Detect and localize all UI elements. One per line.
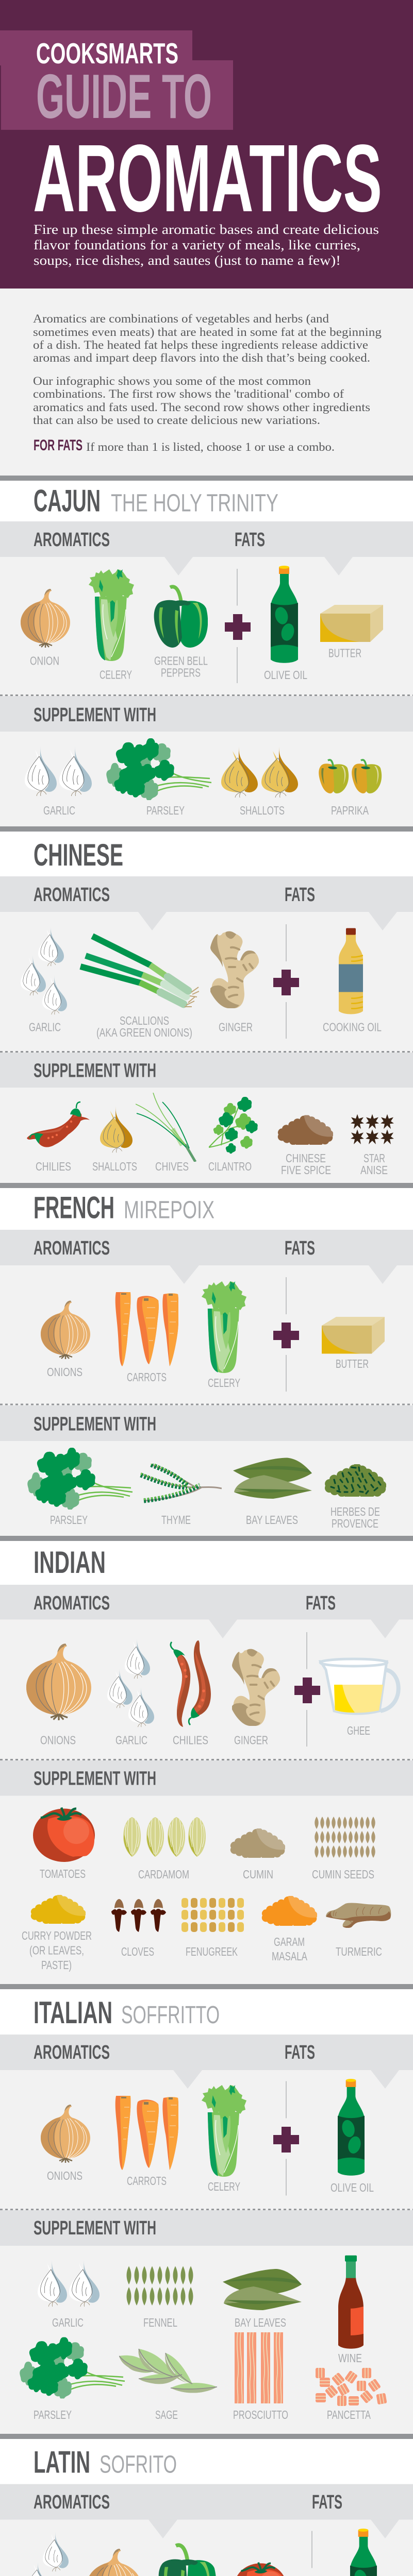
icon: carrots: [115, 2095, 178, 2170]
band: supplement with: [0, 2210, 413, 2246]
icon: olive oil: [271, 566, 298, 663]
icon: garlic: [107, 1636, 154, 1727]
heading: chinese: CHINESE: [34, 838, 123, 872]
labels: chinese aromatics and fats: GARLIC: [29, 1020, 61, 1033]
subtitle: soups, rice dishes, and sautes (just to name a few)!: [34, 253, 341, 268]
labels: chinese supplements: CILANTRO: [208, 1160, 252, 1173]
icon: cilantro: [209, 1097, 258, 1154]
icon: cardamom: [123, 1817, 206, 1857]
icon: turmeric: [326, 1903, 391, 1928]
section: french: [0, 1183, 413, 1530]
icon: fennel: [127, 2266, 193, 2306]
logo tab: [0, 30, 233, 130]
labels: indian supplements row 2: MASALA: [272, 1950, 307, 1963]
labels: indian supplements row 1: CUMIN SEEDS: [312, 1868, 374, 1881]
band: aromatics and fats: [0, 876, 413, 930]
labels: french supplements: THYME: [161, 1513, 191, 1527]
labels: indian aromatics and fats: [40, 1724, 370, 1747]
icon: ginger: [232, 1649, 280, 1726]
labels: cajun supplements: SHALLOTS: [240, 804, 285, 817]
icon: garlic: [25, 2529, 72, 2576]
labels: chinese supplements: FIVE SPICE: [281, 1163, 331, 1177]
band: aromatics and fats: FATS: [306, 1592, 336, 1614]
labels: french aromatics and fats: [47, 1357, 369, 1389]
divider and plus: [273, 1277, 299, 1392]
labels: chinese supplements: STAR: [364, 1151, 385, 1165]
band: aromatics and fats: AROMATICS: [34, 2492, 110, 2513]
subtitle: Fire up these simple aromatic bases and create delicious: [34, 222, 379, 237]
band: aromatics and fats: AROMATICS: [34, 884, 110, 906]
icon: onions: [26, 1643, 91, 1720]
section: cajun: [0, 476, 413, 817]
labels: french aromatics and fats: ONIONS: [47, 1365, 82, 1379]
icon: onions: [41, 2105, 90, 2163]
band: supplement with: SUPPLEMENT WITH: [34, 2217, 156, 2239]
intro text: FOR FATS: [34, 437, 82, 454]
icon: fenugreek: [181, 1898, 244, 1932]
icon: paprika: [319, 760, 382, 793]
subheading: THE HOLY TRINITY: [111, 489, 278, 517]
labels: cajun aromatics and fats: BUTTER: [328, 647, 361, 660]
labels: italian supplements: FENNEL: [143, 2316, 177, 2329]
labels: chinese supplements: CHIVES: [155, 1160, 189, 1173]
icon: butter: [320, 605, 383, 642]
icon: thyme: [141, 1463, 222, 1501]
band: supplement with: [0, 696, 413, 732]
band: supplement with: [0, 1405, 413, 1441]
labels: indian aromatics and fats: GARLIC: [115, 1733, 147, 1747]
icon: pancetta: [316, 2368, 387, 2406]
labels: cajun aromatics and fats: CELERY: [100, 668, 132, 681]
icon: bell peppers: [159, 2545, 216, 2576]
heading: indian: INDIAN: [34, 1545, 106, 1580]
icon: chilies: [27, 1102, 90, 1147]
divider and plus: [273, 2081, 299, 2196]
section: chinese: [0, 826, 413, 1177]
intro text: of a dish. The heated fat helps these ingredients release addictive: [33, 338, 368, 351]
icon: sage: [119, 2349, 217, 2393]
band: aromatics and fats: FATS: [312, 2492, 342, 2513]
icon: cumin: [230, 1828, 286, 1860]
icon: onion: [21, 589, 70, 648]
icon: wine: [338, 2256, 364, 2349]
icon: prosciutto: [235, 2332, 283, 2403]
band: aromatics and fats: FATS: [285, 1238, 315, 1259]
band: aromatics and fats: AROMATICS: [34, 1238, 110, 1259]
band: supplement with: [0, 1760, 413, 1796]
heading: cajun: CAJUN: [34, 483, 101, 518]
labels: italian supplements: PARSLEY: [34, 2408, 72, 2421]
labels: french supplements: PROVENCE: [332, 1517, 378, 1530]
labels: french aromatics and fats: BUTTER: [336, 1357, 369, 1370]
labels: italian aromatics and fats: [47, 2169, 374, 2194]
subtitle: flavor foundations for a variety of meals, like curries,: [34, 238, 360, 252]
labels: italian supplements: BAY LEAVES: [235, 2316, 286, 2329]
subheading: MIREPOIX: [124, 1196, 214, 1224]
labels: indian aromatics and fats: ONIONS: [40, 1733, 76, 1747]
labels: indian supplements row 1: CARDAMOM: [138, 1868, 189, 1881]
icon: cloves: [111, 1899, 166, 1932]
labels: french aromatics and fats: CARROTS: [127, 1370, 167, 1384]
subheading: SOFFRITTO: [121, 2002, 220, 2029]
icon: carrots: [115, 1291, 178, 1366]
labels: indian supplements row 2: GARAM: [274, 1935, 305, 1948]
icon: parsley: [106, 738, 211, 801]
labels: chinese supplements: SHALLOTS: [92, 1160, 137, 1173]
labels: indian aromatics and fats: CHILIES: [173, 1733, 208, 1747]
icon: shallots: [221, 744, 298, 798]
labels: indian supplements row 2: PASTE): [41, 1958, 72, 1972]
icon: bay leaves: [223, 2269, 302, 2310]
labels: french supplements: BAY LEAVES: [246, 1513, 298, 1527]
labels: italian supplements: [34, 2316, 371, 2421]
band: aromatics and fats: FATS: [235, 529, 265, 551]
labels: italian aromatics and fats: CELERY: [208, 2180, 240, 2193]
intro text: aromatics and fats used. The second row shows other ingredients: [33, 401, 370, 414]
labels: cajun supplements: PARSLEY: [146, 804, 185, 817]
labels: chinese aromatics and fats: SCALLIONS: [120, 1014, 169, 1027]
labels: indian supplements row 2: FENUGREEK: [186, 1945, 238, 1958]
icon: garlic: [21, 924, 67, 1014]
band: aromatics and fats: AROMATICS: [34, 2042, 110, 2063]
labels: indian supplements row 2: CLOVES: [121, 1945, 154, 1958]
divider and plus: [299, 2531, 325, 2576]
icon: ginger: [210, 931, 259, 1008]
band: aromatics and fats: [0, 521, 413, 575]
labels: cajun supplements: GARLIC: [43, 804, 75, 817]
intro text: Aromatics are combinations of vegetables and herbs (and: [33, 312, 329, 325]
icon: curry powder: [31, 1894, 86, 1926]
labels: french aromatics and fats: CELERY: [208, 1376, 240, 1389]
labels: italian aromatics and fats: OLIVE OIL: [331, 2181, 374, 2194]
divider and plus: [294, 1632, 320, 1747]
icon: chilies: [171, 1640, 211, 1727]
heading: italian: ITALIAN: [34, 1995, 112, 2030]
icon: celery: [202, 2085, 246, 2177]
labels: indian supplements row 2: TURMERIC: [336, 1945, 382, 1958]
labels: italian supplements: PROSCIUTTO: [233, 2408, 288, 2421]
heading: guide to: GUIDE TO: [36, 61, 212, 131]
icon: cumin seeds: [315, 1817, 375, 1858]
band: aromatics and fats: [0, 1230, 413, 1284]
icon: scallions: [80, 936, 199, 1007]
labels: cajun supplements: [43, 804, 369, 817]
band: aromatics and fats: FATS: [285, 884, 315, 906]
icon: cooking oil: [339, 928, 363, 1014]
labels: italian supplements: PANCETTA: [327, 2408, 371, 2421]
labels: french supplements: [50, 1505, 380, 1530]
band: aromatics and fats: AROMATICS: [34, 529, 110, 551]
icon: olive oil: [350, 2529, 377, 2576]
labels: chinese aromatics and fats: COOKING OIL: [323, 1020, 382, 1033]
heading: french: FRENCH: [34, 1190, 114, 1225]
icon: garam masala: [262, 1895, 318, 1928]
labels: italian supplements: WINE: [338, 2351, 362, 2365]
band: supplement with: SUPPLEMENT WITH: [34, 1060, 156, 1082]
icon: herbes de provence: [325, 1464, 386, 1499]
header panel: [0, 0, 413, 289]
labels: cajun aromatics and fats: [30, 647, 361, 682]
icon: tomatoes: [235, 2563, 286, 2576]
intro text: Our infographic shows you some of the most common: [33, 375, 311, 387]
labels: french supplements: HERBES DE: [331, 1505, 380, 1518]
labels: italian aromatics and fats: CARROTS: [127, 2174, 167, 2188]
labels: indian supplements row 2: (OR LEAVES,: [29, 1943, 84, 1957]
section: italian: [0, 1984, 413, 2421]
labels: chinese supplements: CHILIES: [36, 1160, 71, 1173]
icon: olive oil: [338, 2079, 365, 2176]
band: aromatics and fats: AROMATICS: [34, 1592, 110, 1614]
intro text: that can also be used to create delicious new variations.: [33, 414, 320, 427]
labels: indian supplements row 1: [40, 1867, 374, 1881]
labels: french supplements: PARSLEY: [50, 1513, 88, 1527]
icon: onions: [87, 2549, 141, 2576]
labels: italian supplements: SAGE: [155, 2408, 178, 2421]
labels: indian aromatics and fats: GHEE: [347, 1724, 370, 1737]
icon: garlic: [25, 743, 92, 796]
labels: chinese supplements: ANISE: [360, 1163, 388, 1177]
icon: tomatoes: [33, 1807, 95, 1862]
labels: chinese supplements: [36, 1151, 388, 1177]
labels: cajun aromatics and fats: OLIVE OIL: [264, 668, 307, 682]
labels: italian aromatics and fats: ONIONS: [47, 2169, 82, 2182]
intro text: combinations. The first row shows the 'traditional' combo of: [33, 387, 344, 400]
band: aromatics and fats: [0, 2035, 413, 2089]
icon: green bell pepper: [154, 587, 208, 648]
section: latin: [0, 2434, 413, 2576]
labels: cajun supplements: PAPRIKA: [331, 804, 369, 817]
intro text: aromas and impart deep flavors into the dish that’s being cooked.: [33, 351, 370, 364]
labels: indian supplements row 2: [22, 1929, 382, 1972]
band: aromatics and fats: [0, 2484, 413, 2538]
divider and plus: [273, 924, 299, 1039]
labels: indian supplements row 1: CUMIN: [243, 1868, 273, 1881]
labels: chinese aromatics and fats: (AKA GREEN ONIONS): [96, 1026, 192, 1039]
labels: cajun aromatics and fats: ONION: [30, 654, 59, 668]
icon: ghee: [320, 1659, 399, 1714]
labels: cajun aromatics and fats: PEPPERS: [161, 666, 201, 679]
labels: indian supplements row 2: CURRY POWDER: [22, 1929, 92, 1942]
icon: bay leaves: [233, 1458, 312, 1499]
icon: parsley: [20, 2337, 125, 2399]
labels: chinese supplements: CHINESE: [286, 1151, 326, 1165]
heading: latin: LATIN: [34, 2445, 90, 2479]
subtitle: [34, 222, 379, 268]
icon: chinese five spice: [278, 1115, 334, 1147]
intro text: If more than 1 is listed, choose 1 or use a combo.: [86, 440, 335, 453]
divider and plus: [225, 569, 251, 683]
icon: parsley: [27, 1448, 133, 1511]
intro text: [33, 312, 382, 454]
icon: shallot: [100, 1105, 133, 1153]
band: aromatics and fats: [0, 1585, 413, 1638]
logo: cooksmarts: COOKSMARTS: [36, 37, 178, 70]
icon: star anise: [351, 1114, 394, 1144]
icon: chives: [136, 1093, 195, 1162]
band: aromatics and fats: FATS: [285, 2042, 315, 2063]
section: indian: [0, 1536, 413, 1972]
icon: butter: [322, 1317, 385, 1354]
labels: indian supplements row 1: TOMATOES: [40, 1867, 86, 1880]
labels: indian aromatics and fats: GINGER: [234, 1733, 268, 1747]
labels: chinese aromatics and fats: [29, 1014, 382, 1039]
icon: onions: [41, 1300, 90, 1359]
band: supplement with: SUPPLEMENT WITH: [34, 1768, 156, 1790]
subheading: SOFRITO: [100, 2451, 177, 2478]
labels: chinese aromatics and fats: GINGER: [219, 1020, 253, 1033]
icon: celery: [89, 569, 134, 661]
band: supplement with: [0, 1053, 413, 1088]
labels: italian supplements: GARLIC: [52, 2316, 84, 2329]
band: supplement with: SUPPLEMENT WITH: [34, 1414, 156, 1435]
icon: garlic: [38, 2258, 100, 2307]
icon: celery: [202, 1281, 246, 1373]
intro text: sometimes even meats) that are heated in some fat at the beginning: [33, 326, 382, 338]
band: supplement with: SUPPLEMENT WITH: [34, 704, 156, 726]
labels: cajun aromatics and fats: GREEN BELL: [154, 654, 208, 668]
